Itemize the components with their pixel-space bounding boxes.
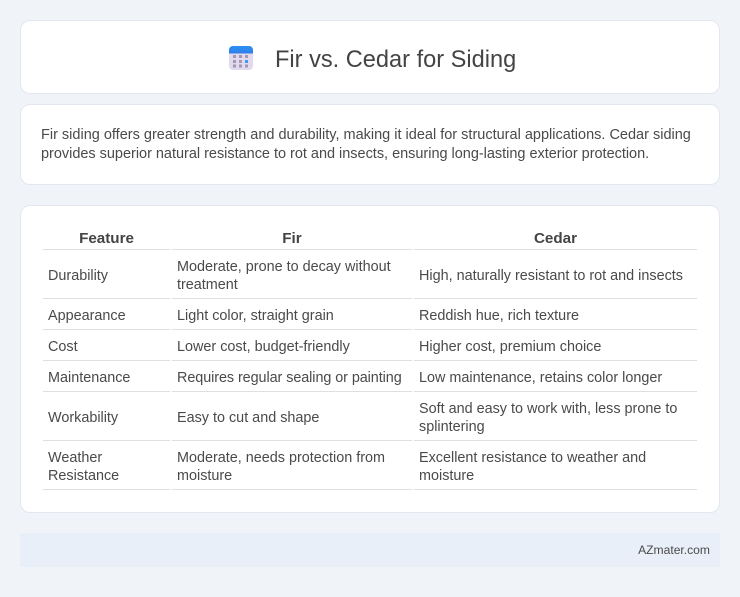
row: maintenance: Low maintenance, retains color longer <box>419 370 662 386</box>
row: maintenance <box>48 370 662 386</box>
row: cost <box>48 339 601 355</box>
row: weather resistance: Excellent resistance to weather and <box>419 450 646 466</box>
panel: comparison table <box>20 205 720 513</box>
summary text: Fir siding offers greater strength and durability, making it ideal for structural applications. Cedar siding <box>41 127 691 143</box>
row: weather resistance: Resistance <box>48 468 119 484</box>
panel: summary <box>20 104 720 185</box>
row: workability: Easy to cut and shape <box>177 410 319 426</box>
footer bar <box>20 533 720 567</box>
row: maintenance: Maintenance <box>48 370 130 386</box>
row: workability: Workability <box>48 410 118 426</box>
row: cost: Higher cost, premium choice <box>419 339 601 355</box>
row: workability: splintering <box>419 419 485 435</box>
column headers: Cedar <box>534 230 577 247</box>
row: maintenance: Requires regular sealing or painting <box>177 370 402 386</box>
row: workability: Soft and easy to work with, less prone to <box>419 401 677 417</box>
row: weather resistance <box>48 450 646 484</box>
row: durability: High, naturally resistant to rot and insects <box>419 268 683 284</box>
title: Fir vs. Cedar for Siding <box>275 47 516 73</box>
row: appearance: Appearance <box>48 308 126 324</box>
row: appearance: Reddish hue, rich texture <box>419 308 579 324</box>
row: appearance: Light color, straight grain <box>177 308 334 324</box>
row: weather resistance: moisture <box>419 468 474 484</box>
row: durability <box>48 259 683 293</box>
row: cost: Cost <box>48 339 78 355</box>
row: cost: Lower cost, budget-friendly <box>177 339 350 355</box>
icon: calendar <box>229 46 253 70</box>
comparison table <box>43 230 697 490</box>
row: durability: Moderate, prone to decay without <box>177 259 391 275</box>
row: weather resistance: Weather <box>48 450 102 466</box>
row: durability: treatment <box>177 277 238 293</box>
row: durability: Durability <box>48 268 108 284</box>
summary text: provides superior natural resistance to rot and insects, ensuring long-lasting exterior protection. <box>41 146 649 162</box>
panel: title card <box>20 20 720 94</box>
column headers <box>79 230 577 247</box>
summary text <box>41 127 691 162</box>
row: workability <box>48 401 677 435</box>
row: weather resistance: moisture <box>177 468 232 484</box>
column headers: Fir <box>282 230 302 247</box>
column headers: Feature <box>79 230 134 247</box>
row: appearance <box>48 308 579 324</box>
footer credit: AZmater.com <box>638 543 710 557</box>
row: weather resistance: Moderate, needs protection from <box>177 450 385 466</box>
